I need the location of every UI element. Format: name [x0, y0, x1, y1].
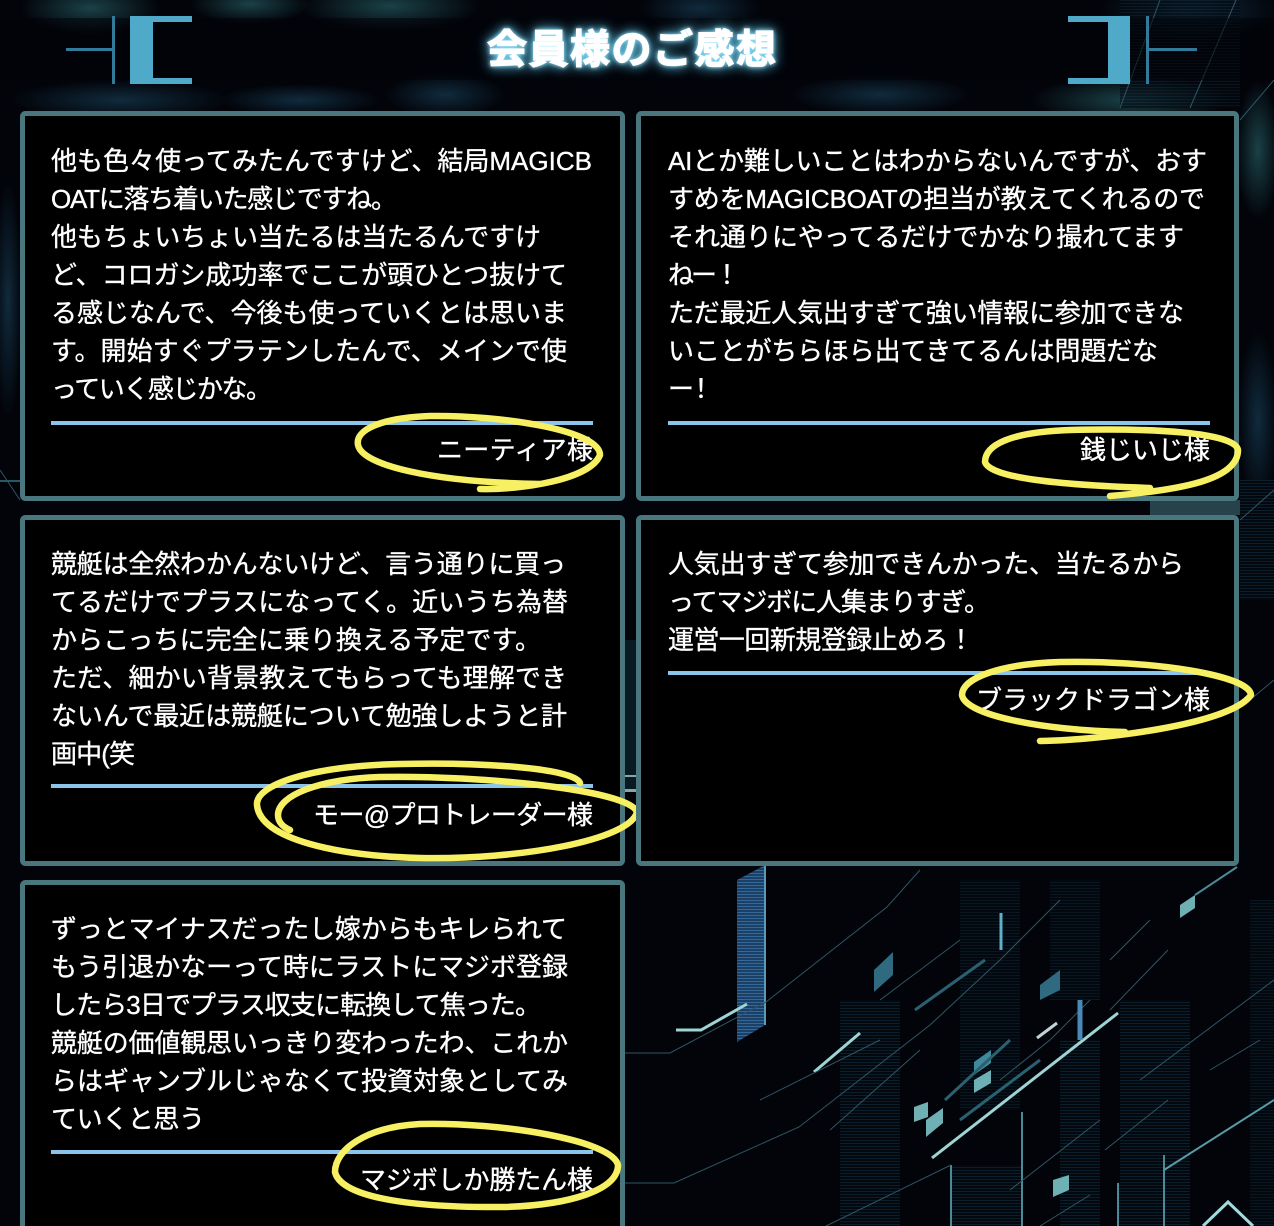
panel: testimonial 1 [22, 114, 622, 498]
panel: testimonial 1: っていく感じかな。 [51, 374, 272, 404]
panel: testimonial 2: ー！ [668, 374, 714, 404]
panel: testimonial 2: ただ最近人気出すぎて強い情報に参加できな [668, 298, 1184, 328]
panel: testimonial 4: ブラックドラゴン様 [976, 685, 1210, 715]
panel: testimonial 5: ずっとマイナスだったし嫁からもキレられて [51, 914, 567, 944]
panel: testimonial 5: 競艇の価値観思いっきり変わったわ、これか [51, 1028, 568, 1058]
panel: testimonial 5: もう引退かなーって時にラストにマジボ登録 [51, 952, 568, 982]
panel: testimonial 2: 銭じいじ様 [1080, 435, 1210, 465]
panel: testimonial 2: それ通りにやってるだけでかなり撮れてます [668, 222, 1184, 252]
panel: testimonial 1: ニーティア様 [437, 435, 593, 465]
panel: testimonial 4: 運営一回新規登録止めろ！ [668, 625, 974, 655]
panel: testimonial 1: ど、コロガシ成功率でここが頭ひとつ抜けて [51, 260, 567, 290]
panel: testimonial 3: ないんで最近は競艇について勉強しようと計 [51, 701, 567, 731]
panel: testimonial 4 [638, 518, 1251, 864]
panel: testimonial 3: 画中(笑 [51, 739, 135, 769]
title: 会員様のご感想 [487, 28, 776, 72]
panel: testimonial 2: ねー！ [668, 260, 740, 290]
panel: testimonial 3: 競艇は全然わかんないけど、言う通りに買っ [51, 549, 566, 579]
right title bracket [1068, 16, 1197, 84]
panel: testimonial 2: いことがちらほら出てきてるんは問題だな [668, 336, 1158, 366]
panel: testimonial 1: OATに落ち着いた感じですね。 [51, 184, 397, 214]
panel: testimonial 5: マジボしか勝たん様 [360, 1165, 593, 1195]
panel: testimonial 3: てるだけでプラスになってく。近いうち為替 [51, 587, 568, 617]
panel: testimonial 1: す。開始すぐプラテンしたんで、メインで使 [51, 336, 567, 366]
panel: testimonial 3: ただ、細かい背景教えてもらっても理解でき [51, 663, 567, 693]
panel: testimonial 3: モー@プロトレーダー様 [313, 800, 593, 830]
panel: testimonial 5: らはギャンブルじゃなくて投資対象としてみ [51, 1066, 568, 1096]
panel: testimonial 4: 人気出すぎて参加できんかった、当たるから [668, 549, 1184, 579]
left title bracket [66, 16, 192, 84]
panel: testimonial 2: すめをMAGICBOATの担当が教えてくれるので [668, 184, 1205, 214]
panel: testimonial 1: る感じなんで、今後も使っていくとは思いま [51, 298, 567, 328]
panel: testimonial 5: ていくと思う [51, 1104, 205, 1134]
panel: testimonial 5 [22, 882, 622, 1226]
panel: testimonial 1: 他も色々使ってみたんですけど、結局MAGICB [51, 146, 592, 176]
panel: testimonial 4: ってマジボに人集まりすぎ。 [668, 587, 990, 617]
panel: testimonial 5: したら3日でプラス収支に転換して焦った。 [51, 990, 541, 1020]
title band [0, 18, 1274, 80]
panel: testimonial 3 [22, 518, 637, 864]
panel: testimonial 3: からこっちに完全に乗り換える予定です。 [51, 625, 541, 655]
panel: testimonial 1: 他もちょいちょい当たるは当たるんですけ [51, 222, 541, 252]
panel: testimonial 2 [638, 114, 1238, 498]
panel: testimonial 2: AIとか難しいことはわからないんですが、おす [668, 146, 1207, 176]
